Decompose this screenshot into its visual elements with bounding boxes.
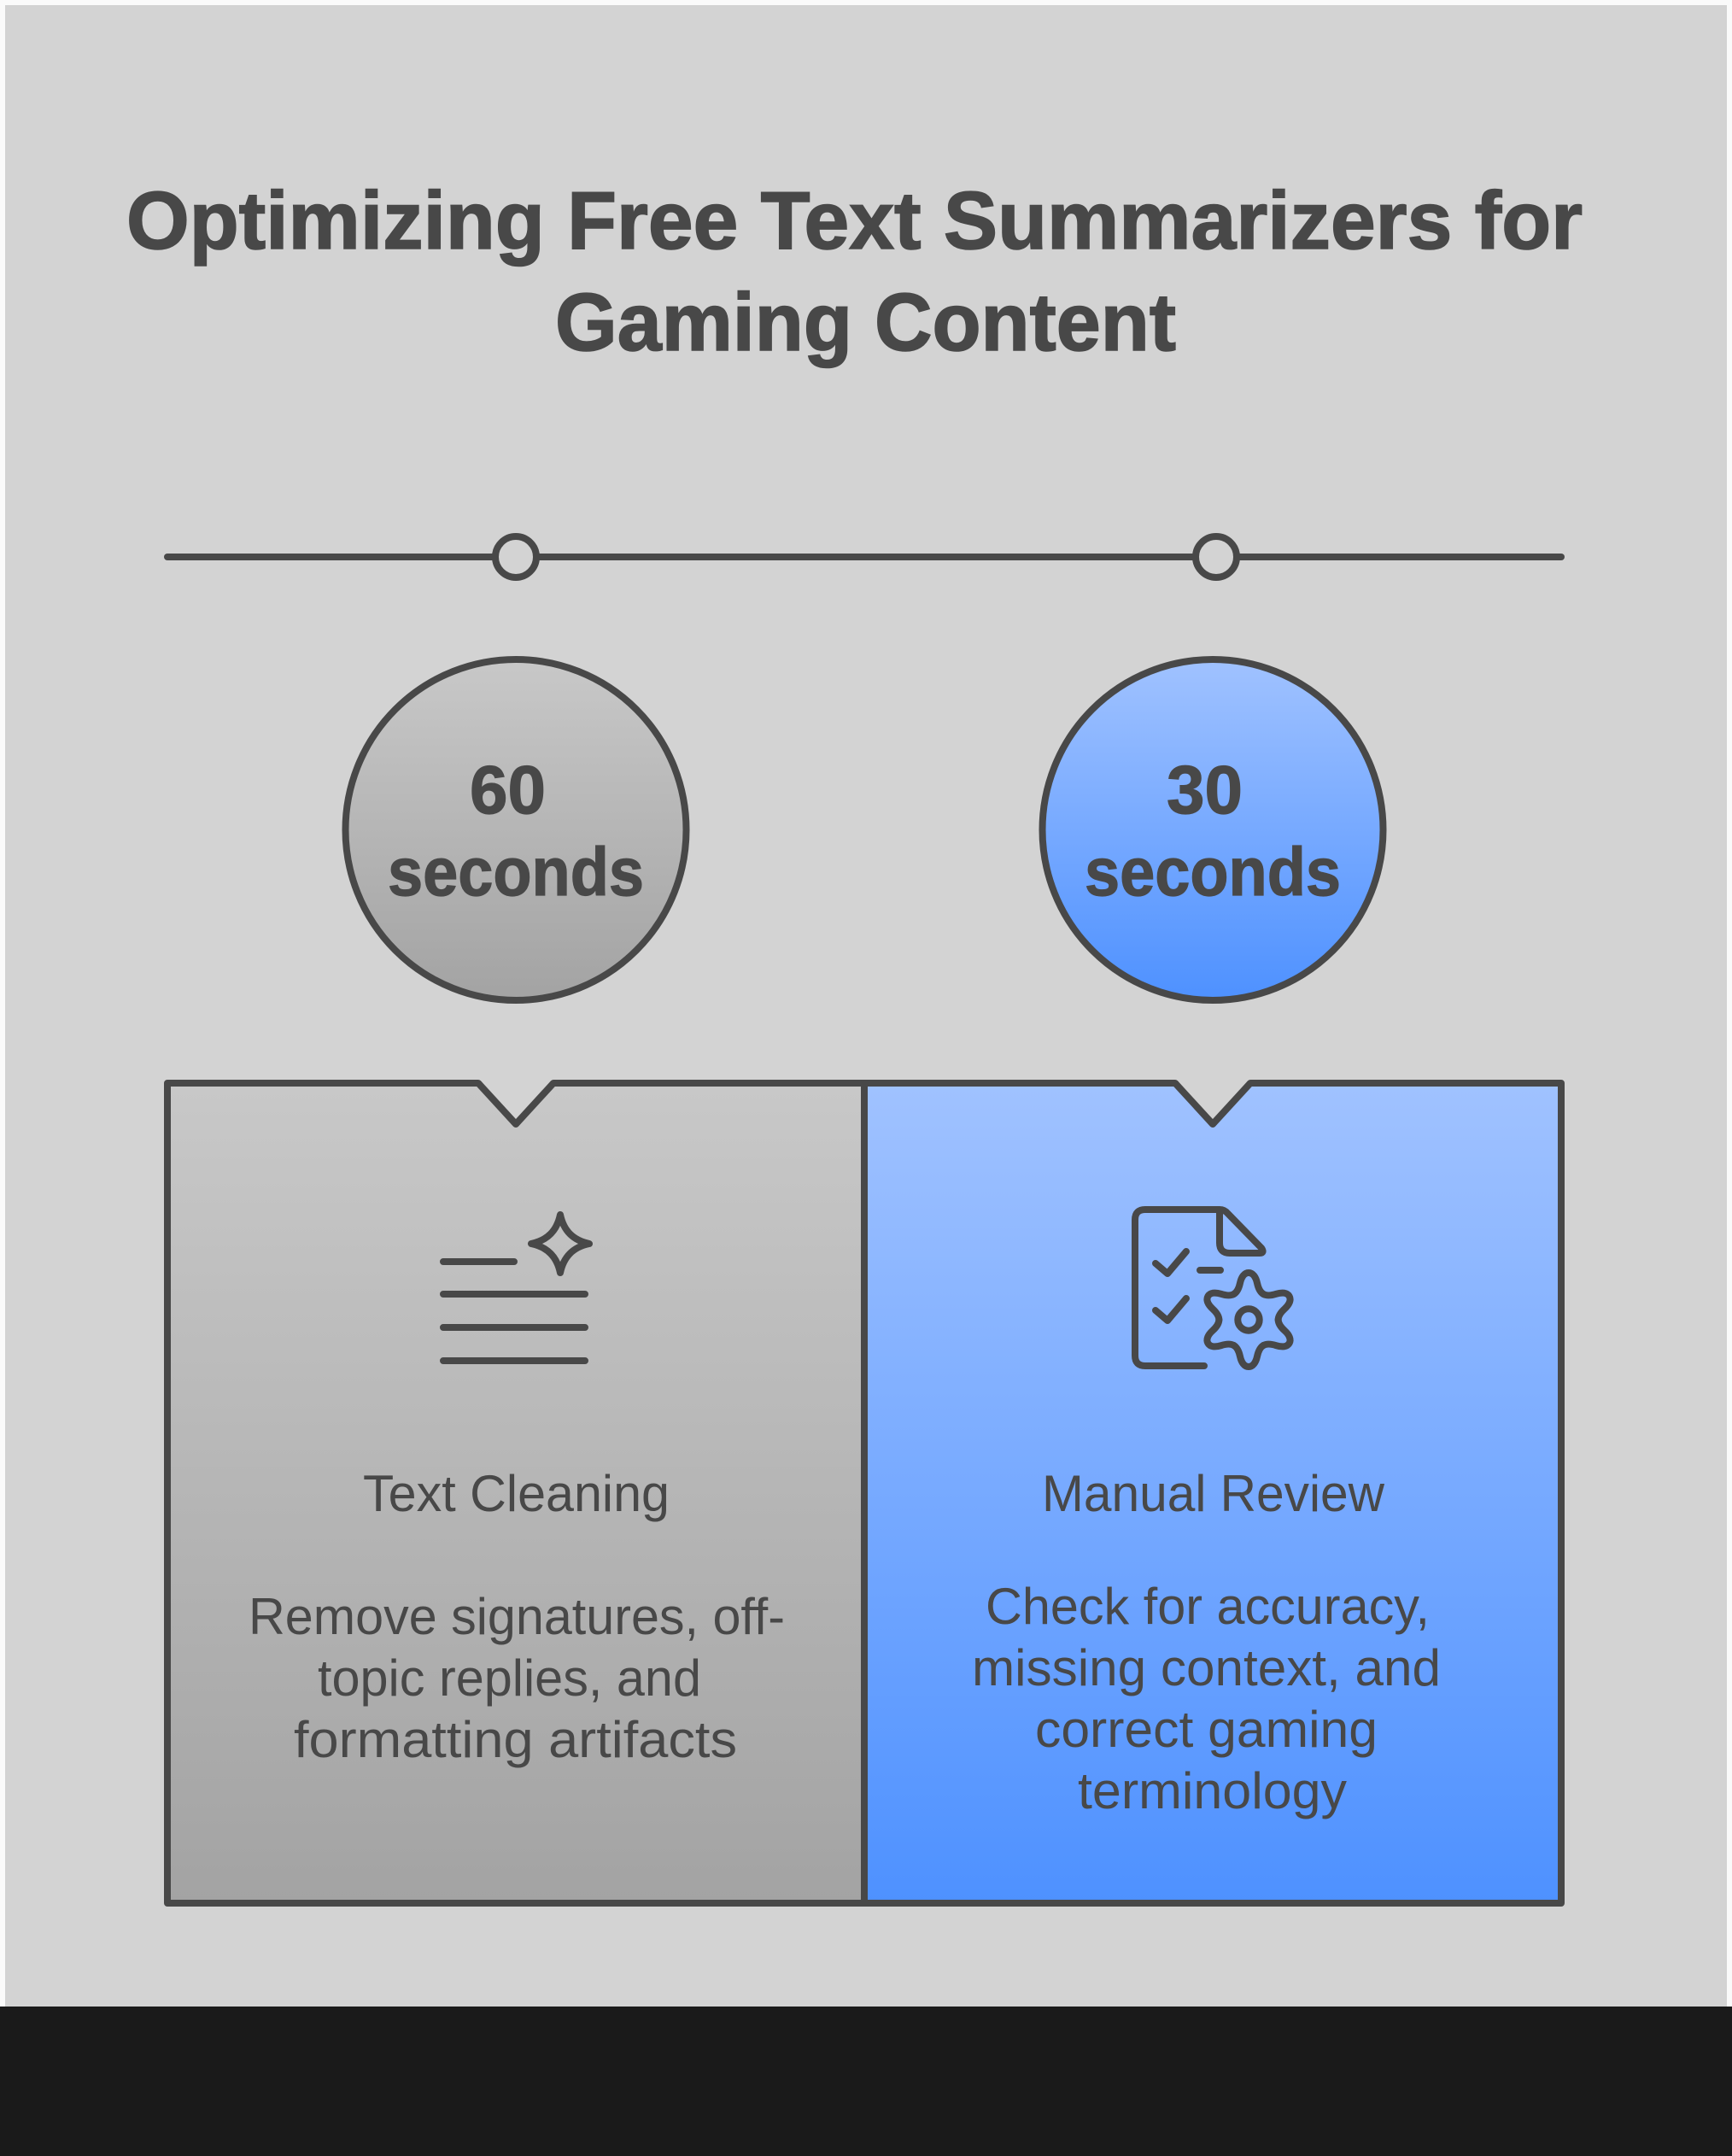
title: Optimizing Free Text Summarizers for bbox=[126, 175, 1583, 267]
icon: text lines with sparkle bbox=[443, 1215, 589, 1361]
timeline marker: 60 seconds bbox=[495, 536, 536, 577]
panel: Text Cleaning bbox=[167, 1083, 864, 1903]
time circle: 60 seconds: seconds bbox=[388, 834, 644, 910]
panel heading: Text Cleaning: Text Cleaning bbox=[363, 1465, 670, 1522]
panel description: Manual Review: missing context, and bbox=[972, 1639, 1441, 1696]
panel description: Manual Review bbox=[972, 1578, 1441, 1819]
panel heading: Manual Review: Manual Review bbox=[1042, 1465, 1385, 1522]
panel description: Text Cleaning: formatting artifacts bbox=[294, 1711, 737, 1768]
bottom black band bbox=[0, 2007, 1732, 2156]
time circle: 30 seconds: 30 bbox=[1167, 752, 1243, 828]
panel: Manual Review bbox=[864, 1083, 1561, 1903]
icon: checklist document with gear bbox=[1135, 1210, 1296, 1367]
title bbox=[126, 175, 1583, 368]
panel description: Manual Review: Check for accuracy, bbox=[986, 1578, 1430, 1635]
panel description: Text Cleaning: Remove signatures, off- bbox=[249, 1588, 785, 1645]
timeline marker: 30 seconds bbox=[1196, 536, 1237, 577]
panel description: Text Cleaning bbox=[249, 1588, 785, 1768]
time circle: 60 seconds bbox=[345, 659, 687, 1000]
panel description: Manual Review: correct gaming bbox=[1035, 1701, 1378, 1758]
timeline bbox=[167, 536, 1561, 577]
time circle: 60 seconds: 60 bbox=[470, 752, 546, 828]
time circle: 30 seconds bbox=[1042, 659, 1384, 1000]
title: Gaming Content bbox=[555, 277, 1176, 368]
panel description: Manual Review: terminology bbox=[1078, 1762, 1347, 1819]
time circle: 30 seconds: seconds bbox=[1085, 834, 1341, 910]
panel description: Text Cleaning: topic replies, and bbox=[318, 1649, 701, 1707]
